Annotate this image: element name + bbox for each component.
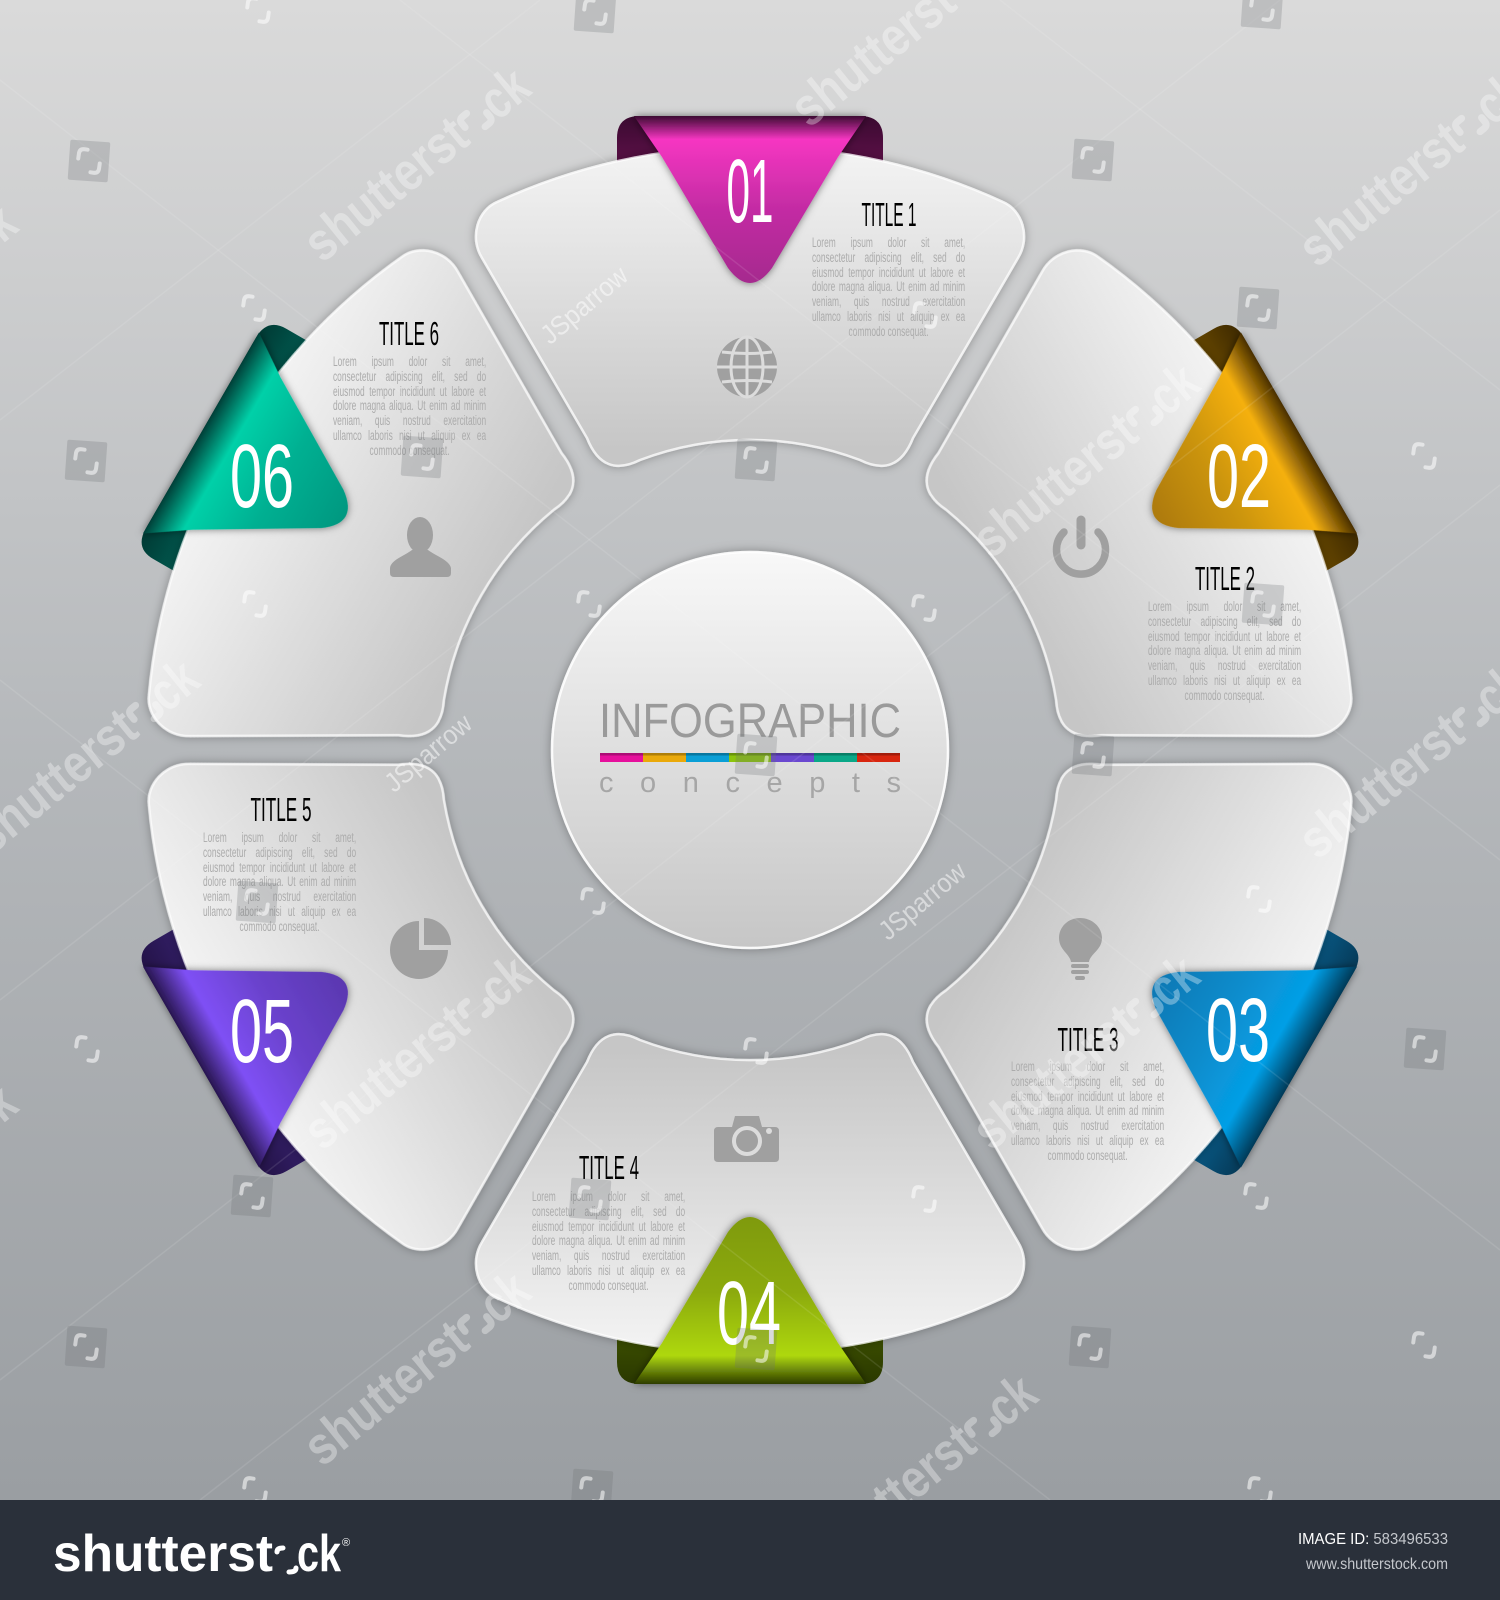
text block 4: eiusmod tempor incididunt ut labore et (532, 1219, 685, 1234)
text block 5: commodo consequat. (240, 919, 320, 934)
text block 4: consectetur adipiscing elit, sed do (532, 1204, 685, 1219)
text block 3: consectetur adipiscing elit, sed do (1011, 1074, 1164, 1089)
number 06: 06 (230, 427, 294, 527)
icon: globe (717, 337, 777, 397)
text block 6: dolore magna aliqua. Ut enim ad minim (333, 398, 486, 413)
text block 5: dolore magna aliqua. Ut enim ad minim (203, 874, 356, 889)
ribbon 4 (634, 1217, 866, 1384)
image id: IMAGE ID: 583496533 (1298, 1531, 1448, 1548)
ribbon back 1 (617, 116, 883, 170)
watermark: author name: JSparrow (873, 856, 972, 946)
text block 2: ullamco laboris nisi ut aliquip ex ea (1148, 673, 1301, 688)
text block 6: eiusmod tempor incididunt ut labore et (333, 384, 486, 399)
text block 3: veniam, quis nostrud exercitation (1011, 1118, 1164, 1133)
panel 5 (64, 655, 641, 1304)
text block 3: dolore magna aliqua. Ut enim ad minim (1011, 1103, 1164, 1118)
watermark: shutterstock repeats: shutterst (292, 105, 480, 273)
text block 5: Lorem ipsum dolor sit amet, (203, 830, 356, 845)
ribbon 5 (143, 883, 404, 1167)
number 04: 04 (717, 1264, 781, 1364)
text block 2: Lorem ipsum dolor sit amet, (1148, 599, 1301, 614)
website: www.shutterstock.com (1305, 1556, 1448, 1573)
text: TITLE 1 (862, 196, 916, 233)
text: 01 (726, 142, 774, 242)
watermark: shutterstock repeats: shutterst (1287, 110, 1475, 278)
text block 3: Lorem ipsum dolor sit amet, (1011, 1059, 1164, 1074)
text block 4: ullamco laboris nisi ut aliquip ex ea (532, 1263, 685, 1278)
registered mark: ® (342, 1537, 350, 1549)
center circle (552, 552, 948, 948)
watermark: shutterstock repeats: ck (1137, 351, 1211, 427)
watermark: shutterstock repeats: shutterst (799, 1412, 987, 1580)
rainbow bar (600, 753, 900, 762)
ribbon 6 (143, 333, 404, 617)
watermark: shutterstock repeats: shutterst (961, 401, 1149, 569)
ribbon back 2 (1186, 318, 1366, 575)
icon: person (390, 517, 451, 577)
text block 4 (532, 1189, 686, 1293)
text block 1: eiusmod tempor incididunt ut labore et (812, 265, 965, 280)
watermark: author name: JSparrow (535, 260, 634, 350)
card 6 (90, 211, 641, 845)
footer bar (0, 1500, 1500, 1600)
title 5: TITLE 5 (250, 791, 312, 828)
text block 1: consectetur adipiscing elit, sed do (812, 250, 965, 265)
number 02: 02 (1207, 427, 1271, 527)
watermark: shutterstock repeats: ck (468, 55, 542, 131)
text block 6 (333, 354, 486, 458)
text block 5: consectetur adipiscing elit, sed do (203, 845, 356, 860)
text block 1: dolore magna aliqua. Ut enim ad minim (812, 279, 965, 294)
card 3 (859, 655, 1410, 1289)
icon: camera (714, 1116, 779, 1162)
center title: INFOGRAPHIC (599, 695, 901, 748)
ribbon back 4 (617, 1330, 883, 1384)
text block 1: veniam, quis nostrud exercitation (812, 294, 965, 309)
ribbon back 3 (1186, 925, 1366, 1182)
ribbon 3 (1096, 883, 1357, 1167)
watermark: shutterstock repeats: shutterst (292, 1309, 480, 1477)
text block 2 (1148, 599, 1302, 703)
text block 5 (203, 830, 356, 934)
text block 6: Lorem ipsum dolor sit amet, (333, 354, 486, 369)
title 2: TITLE 2 (1195, 560, 1255, 597)
text block 4: Lorem ipsum dolor sit amet, (532, 1189, 685, 1204)
text block 3: ullamco laboris nisi ut aliquip ex ea (1011, 1133, 1164, 1148)
text block 4: veniam, quis nostrud exercitation (532, 1248, 685, 1263)
title 3: TITLE 3 (1058, 1021, 1118, 1058)
icon: bulb (1059, 918, 1102, 980)
panel 6 (64, 196, 641, 845)
watermark: author name (379, 260, 972, 946)
text block 2: commodo consequat. (1185, 688, 1265, 703)
panel 3 (859, 655, 1436, 1304)
text block 1: ullamco laboris nisi ut aliquip ex ea (812, 309, 965, 324)
title 4: TITLE 4 (579, 1149, 639, 1186)
text block 5: eiusmod tempor incididunt ut labore et (203, 860, 356, 875)
text block 5: veniam, quis nostrud exercitation (203, 889, 356, 904)
footer logo: shutterst (53, 1525, 273, 1583)
card 4 (476, 1034, 1024, 1354)
watermark: shutterstock repeats: shutterst (1287, 702, 1475, 870)
card 5 (90, 655, 641, 1289)
icon: power (1056, 520, 1106, 574)
footer logo: ck (297, 1525, 341, 1583)
text block 6: ullamco laboris nisi ut aliquip ex ea (333, 428, 486, 443)
number 03: 03 (1206, 981, 1270, 1081)
icon: pie chart (390, 918, 451, 979)
text block 6: veniam, quis nostrud exercitation (333, 413, 486, 428)
watermark: shutterstock repeats: ck (975, 1362, 1049, 1438)
text block 2: eiusmod tempor incididunt ut labore et (1148, 629, 1301, 644)
watermark: shutterstock repeats: shutterst (961, 993, 1149, 1161)
ribbon 1 (634, 116, 866, 283)
text block 1: commodo consequat. (849, 324, 929, 339)
text block 3: eiusmod tempor incididunt ut labore et (1011, 1089, 1164, 1104)
text block 3 (1011, 1059, 1164, 1163)
card 2 (859, 211, 1410, 845)
panel 2 (859, 196, 1436, 845)
text block 6: commodo consequat. (370, 443, 450, 458)
watermark: shutterstock repeats: shutterst (292, 993, 480, 1161)
text block 1: Lorem ipsum dolor sit amet, (812, 235, 965, 250)
ribbon back 5 (134, 925, 314, 1182)
title 6: TITLE 6 (379, 315, 439, 352)
watermark: shutterstock repeats: ck (468, 1259, 542, 1335)
text block 1 (812, 235, 966, 339)
text block 5: ullamco laboris nisi ut aliquip ex ea (203, 904, 356, 919)
text block 2: dolore magna aliqua. Ut enim ad minim (1148, 643, 1301, 658)
ribbon back 6 (134, 318, 314, 575)
panel 1 (476, 116, 1024, 466)
text block 4: commodo consequat. (569, 1278, 649, 1293)
text block 3: commodo consequat. (1048, 1148, 1128, 1163)
card 1 (476, 146, 1024, 466)
watermark: shutterstock repeats: ck (1137, 943, 1211, 1019)
watermark: author name: JSparrow (379, 708, 478, 798)
watermark: shutterstock repeats: ck (468, 943, 542, 1019)
text block 4: dolore magna aliqua. Ut enim ad minim (532, 1233, 685, 1248)
ribbon 2 (1096, 333, 1357, 617)
text block 2: consectetur adipiscing elit, sed do (1148, 614, 1301, 629)
center subtitle: concepts (599, 767, 901, 799)
text block 2: veniam, quis nostrud exercitation (1148, 658, 1301, 673)
watermark: shutterstock repeats: ck (137, 647, 211, 723)
number 05: 05 (230, 982, 294, 1082)
panel 4 (476, 1034, 1024, 1384)
text block 6: consectetur adipiscing elit, sed do (333, 369, 486, 384)
